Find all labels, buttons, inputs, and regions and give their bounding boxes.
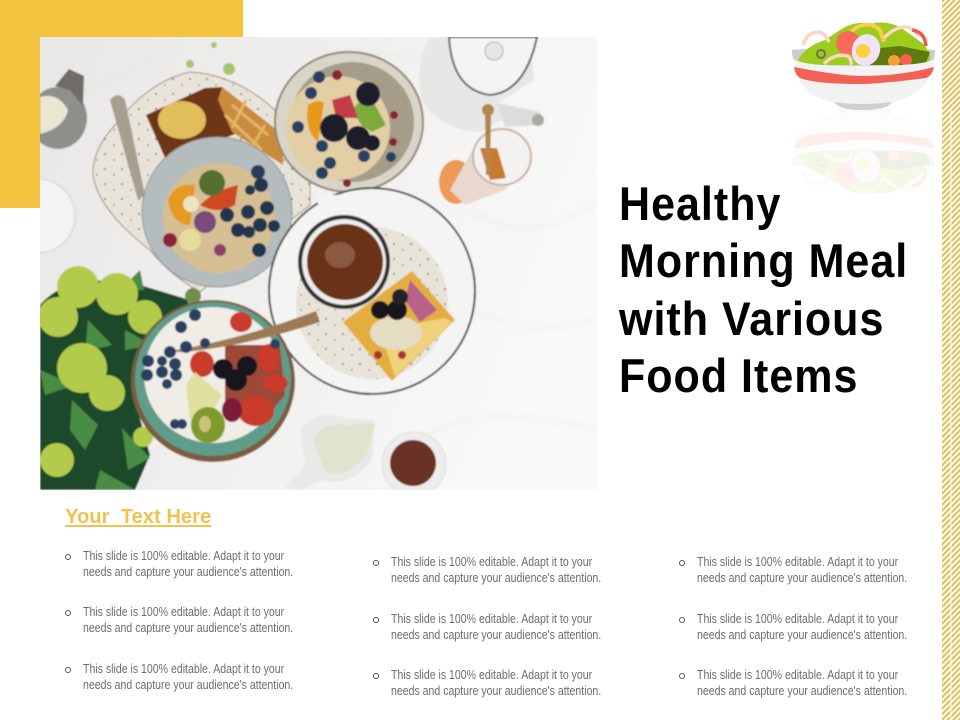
bullet 3.3: This slide is 100% editable. Adapt it to your: [697, 667, 898, 682]
oatmeal bowl with fruit: [142, 137, 292, 287]
bullet 2.3: needs and capture your audience's attention.: [391, 683, 601, 698]
bullet 3.3: needs and capture your audience's attention.: [697, 683, 907, 698]
bullet 3.2: [679, 611, 907, 642]
bullet 2.3: [373, 667, 601, 698]
bullet 2.1: This slide is 100% editable. Adapt it to your: [391, 554, 592, 569]
bullet 3.2: needs and capture your audience's attention.: [697, 627, 907, 642]
bullet 1.2: needs and capture your audience's attention.: [83, 620, 293, 635]
waffle with blackberries: [343, 271, 455, 381]
bullet 3.1: This slide is 100% editable. Adapt it to your: [697, 554, 898, 569]
bullet 1.3: needs and capture your audience's attention.: [83, 677, 293, 692]
speckled inner plate: [296, 227, 448, 379]
bullet 2.1: [373, 554, 601, 585]
left white plate: [1, 179, 75, 253]
spice cup: [382, 432, 446, 496]
bullet 2.2: needs and capture your audience's attention.: [391, 627, 601, 642]
spoon on plate: [110, 95, 145, 200]
salad bowl: [792, 23, 935, 110]
bullet 3.2: This slide is 100% editable. Adapt it to your: [697, 611, 898, 626]
speckled plate: [93, 72, 310, 292]
milk pitcher: [285, 415, 375, 490]
food photo: [40, 37, 596, 490]
small herbs: [186, 42, 235, 75]
bullet column 2: [373, 554, 601, 698]
white plate: [269, 188, 475, 394]
bullet 3.1: [679, 554, 907, 585]
bullet 1.2: [65, 604, 293, 635]
flowers and leaves: [38, 266, 201, 490]
waffle with butter: [146, 87, 283, 165]
spoon and fruit bowl: [131, 300, 320, 462]
title: Food Items: [619, 349, 858, 402]
title: Morning Meal: [619, 234, 908, 287]
bullet 1.1: [65, 548, 293, 579]
marble background: [30, 27, 610, 500]
bullet 3.3: [679, 667, 907, 698]
salad bowl icon: [792, 22, 935, 194]
bullet 1.3: [65, 661, 293, 692]
bullet 3.1: needs and capture your audience's attention.: [697, 570, 907, 585]
bullet 2.2: This slide is 100% editable. Adapt it to your: [391, 611, 592, 626]
striped right edge band: [942, 0, 960, 720]
honey jar and dipper: [439, 104, 531, 205]
title: with Various: [619, 292, 884, 345]
bullet 1.1: This slide is 100% editable. Adapt it to your: [83, 548, 284, 563]
bullet column 1: [65, 548, 293, 692]
title: Healthy: [619, 177, 781, 230]
bullet 2.2: [373, 611, 601, 642]
bullet column 3: [679, 554, 907, 698]
granola bowl with berries: [275, 52, 423, 192]
yellow corner block: [0, 0, 243, 208]
bullet 1.2: This slide is 100% editable. Adapt it to your: [83, 604, 284, 619]
bullet 2.1: needs and capture your audience's attention.: [391, 570, 601, 585]
bowl reflection: [792, 106, 935, 193]
white teapot: [419, 37, 544, 132]
steel milk jug: [29, 69, 87, 149]
bullet 1.1: needs and capture your audience's attention.: [83, 564, 293, 579]
subheading: Your Text Here: [65, 506, 211, 528]
coffee mug: [298, 195, 390, 309]
title: [618, 177, 908, 402]
bullet 2.3: This slide is 100% editable. Adapt it to your: [391, 667, 592, 682]
bullet 1.3: This slide is 100% editable. Adapt it to your: [83, 661, 284, 676]
